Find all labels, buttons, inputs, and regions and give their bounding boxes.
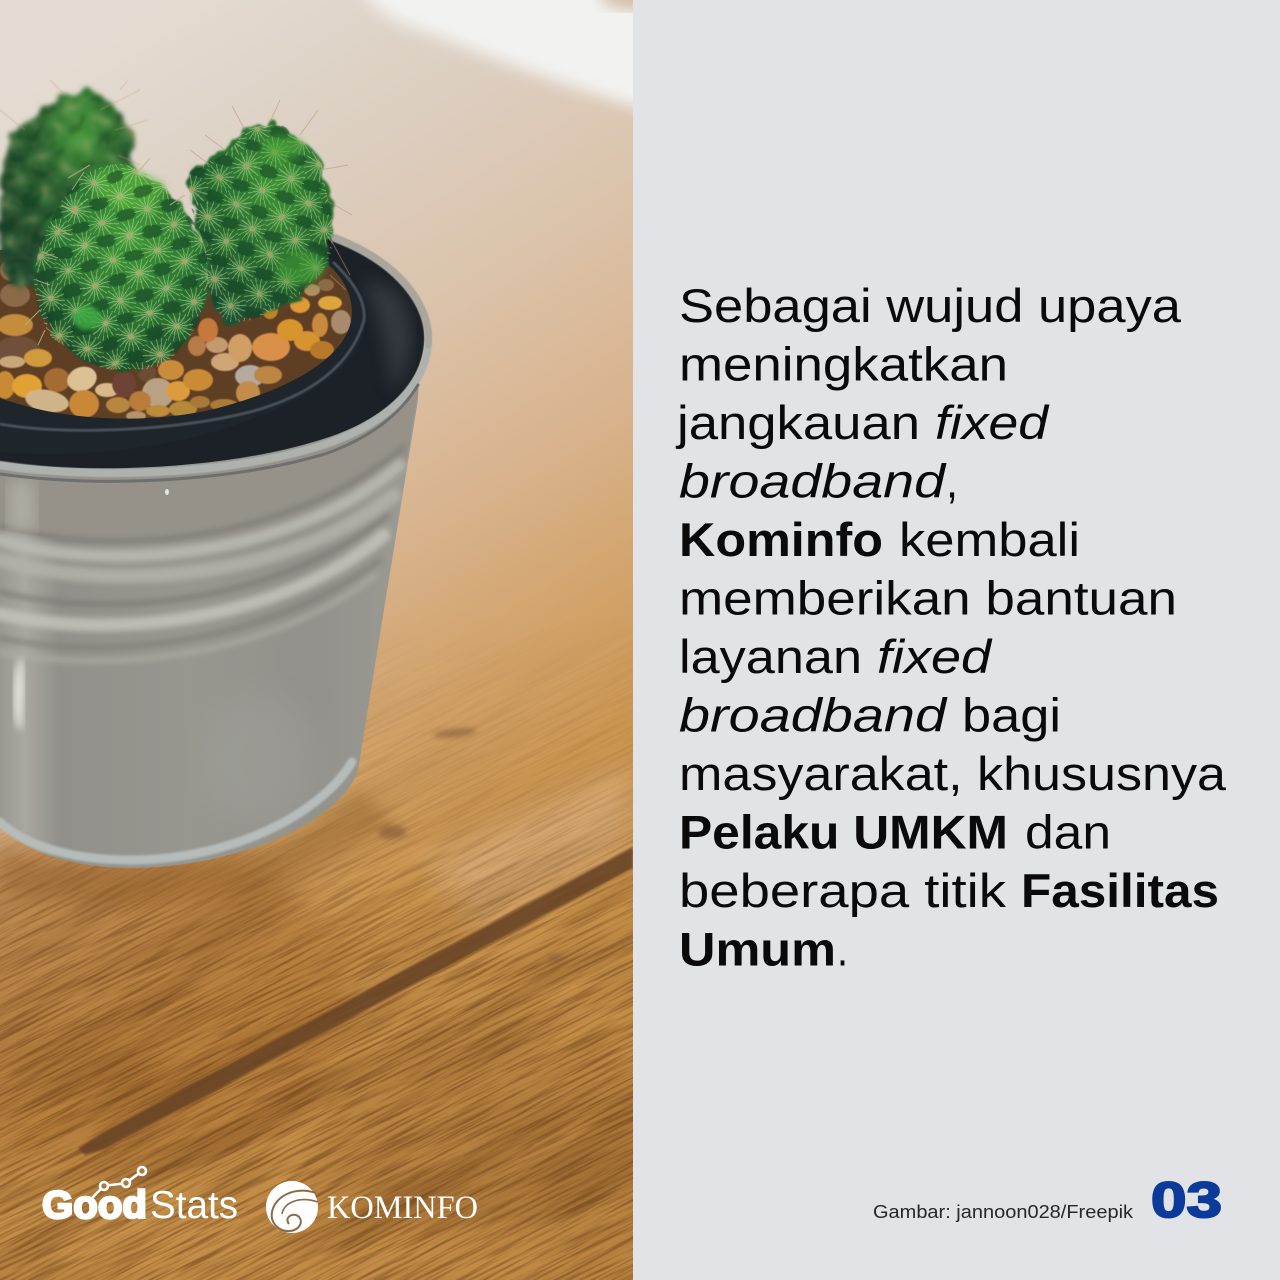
- cactus: right: [189, 100, 352, 322]
- main paragraph: layanan: [679, 630, 862, 683]
- main paragraph: meningkatkan: [679, 338, 1008, 390]
- image credit: Gambar: jannoon028/Freepik: [873, 1202, 1134, 1222]
- main paragraph: Sebagai wujud upaya: [679, 279, 1182, 332]
- main paragraph: kembali: [899, 513, 1080, 566]
- main paragraph: broadband: [679, 454, 947, 508]
- black interior of metal pot: [0, 238, 424, 468]
- base rim of the pot: [0, 762, 352, 860]
- wooden table background: [0, 0, 690, 1280]
- page number: 03: [1151, 1172, 1222, 1228]
- logo: GoodStats: [42, 1167, 238, 1227]
- blurred white background object: [362, 0, 633, 114]
- main paragraph: masyarakat, khususnya: [679, 747, 1227, 800]
- dark plank seam: [78, 847, 633, 1155]
- main paragraph: fixed: [935, 396, 1050, 449]
- soft pot shadow: [0, 790, 392, 906]
- metal pot rim: [0, 238, 428, 481]
- logo: GoodStats: Stats: [150, 1184, 238, 1227]
- main paragraph: jangkauan: [675, 396, 920, 449]
- main paragraph: dan: [1025, 806, 1111, 858]
- gravel: [0, 250, 360, 430]
- metal reflections: [14, 658, 24, 730]
- metal ridges: [0, 447, 404, 661]
- main paragraph: Fasilitas: [1021, 864, 1219, 917]
- logo: Kominfo: [266, 1181, 478, 1233]
- logo: Kominfo: KOMINFO: [327, 1190, 478, 1226]
- main paragraph: beberapa titik: [679, 864, 1007, 917]
- main paragraph: Umum: [679, 922, 836, 976]
- panel: text column background: [633, 0, 1280, 1280]
- main paragraph: .: [837, 922, 848, 976]
- upper metal band: [4, 388, 418, 536]
- cactus: back left: [0, 80, 148, 285]
- main paragraph: Pelaku UMKM: [679, 806, 1008, 858]
- metal pot body: [0, 350, 420, 868]
- shadow stains near pot: [378, 727, 563, 962]
- cactus: front: [25, 158, 209, 371]
- main paragraph: fixed: [877, 630, 993, 683]
- main paragraph: memberikan bantuan: [679, 572, 1177, 624]
- main paragraph: ,: [946, 454, 958, 508]
- main paragraph: broadband: [679, 688, 948, 742]
- main paragraph: [675, 279, 1227, 976]
- main paragraph: Kominfo: [679, 513, 883, 566]
- photo: cactus in a metal pot on a wooden table: [0, 0, 690, 1280]
- inner black pot: [0, 250, 365, 454]
- main paragraph: bagi: [962, 688, 1061, 742]
- logo: GoodStats: Good: [42, 1184, 147, 1227]
